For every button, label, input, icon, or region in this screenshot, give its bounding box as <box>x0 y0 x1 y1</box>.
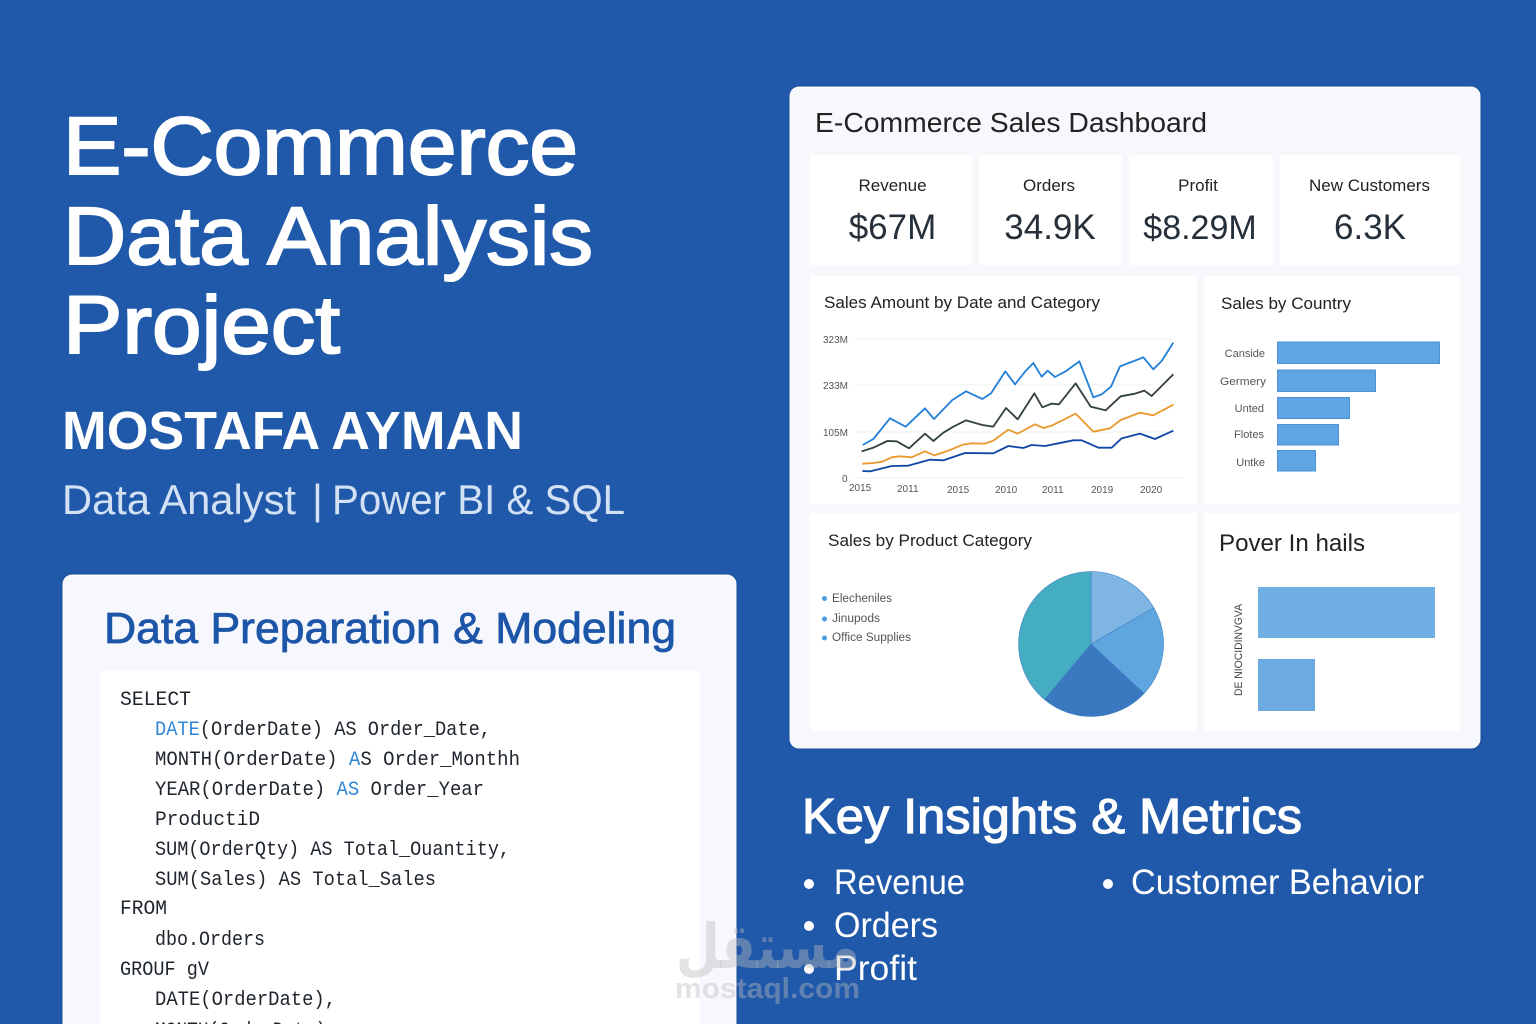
title: Project <box>63 280 340 371</box>
sql code block: dbo.Orders <box>155 929 265 952</box>
pie chart <box>1019 572 1164 716</box>
kpi: orders: Orders <box>1023 176 1075 195</box>
line chart: 233M <box>823 381 848 392</box>
dashboard title: E-Commerce Sales Dashboard <box>815 107 1207 138</box>
heading: key insights: Key Insights & Metrics <box>802 790 1302 844</box>
title: Data Analysis <box>63 191 593 282</box>
kpi: orders: 34.9K <box>1004 208 1096 247</box>
bar chart: countries <box>1220 342 1440 471</box>
kpi: profit <box>1129 155 1273 265</box>
sql code block: YEAR(OrderDate) AS Order_Year <box>155 779 484 802</box>
sql code block: SELECT <box>120 689 191 712</box>
author role <box>62 476 625 523</box>
panel: power in hails <box>1204 513 1460 731</box>
line chart: 0 <box>842 474 848 485</box>
title: E-Commerce <box>63 101 578 192</box>
insights list: Customer Behavior <box>1131 863 1424 902</box>
line chart: 2015 <box>947 485 970 496</box>
kpi: new customers <box>1280 155 1460 265</box>
line chart: 2015 <box>849 483 872 494</box>
author role: Data Analyst <box>62 476 296 523</box>
line chart: 323M <box>823 335 848 346</box>
sql code block: MONTH(OrderDate) AS Order_Monthh <box>155 749 520 772</box>
bar chart: countries: Canside <box>1225 348 1265 360</box>
kpi: revenue: Revenue <box>858 176 927 195</box>
bar chart: power <box>1233 587 1435 711</box>
sql code block: ProductiD <box>155 809 260 832</box>
watermark <box>675 910 860 1005</box>
panel: sales dashboard <box>789 86 1481 749</box>
panel: power in hails: Pover In hails <box>1219 530 1365 557</box>
panel: sales by country: Sales by Country <box>1221 295 1352 313</box>
sql code block: SUM(Sales) AS Total_Sales <box>155 869 436 892</box>
line chart: 2010 <box>995 485 1018 496</box>
bar chart: power: DE NIOCIDINVGVA <box>1233 603 1245 696</box>
insights list: Profit <box>834 949 917 988</box>
legend: Jinupods <box>832 613 880 625</box>
bar chart: countries: Untke <box>1236 457 1265 469</box>
kpi: new customers: New Customers <box>1309 176 1430 195</box>
sql code block: FROM <box>120 898 167 921</box>
kpi: profit: Profit <box>1178 176 1218 195</box>
legend: Office Supplies <box>832 632 911 644</box>
line chart: 2011 <box>897 484 919 495</box>
author role: | <box>312 476 323 523</box>
sql code block <box>100 671 700 1024</box>
kpi: orders <box>979 155 1122 265</box>
line chart: 105M <box>823 428 848 439</box>
bar chart: countries: Unted <box>1235 403 1264 415</box>
insights list <box>804 863 1424 988</box>
sql code block: SUM(OrderQty) AS Total_Ouantity, <box>155 839 510 862</box>
legend: Elecheniles <box>832 593 892 605</box>
legend <box>822 593 911 644</box>
insights list: Orders <box>834 906 938 945</box>
kpi: revenue: $67M <box>849 208 936 247</box>
panel: data preparation and modeling <box>62 574 737 1024</box>
sql code block: DATE(OrderDate), <box>155 989 336 1012</box>
line chart: 2020 <box>1140 485 1163 496</box>
line chart <box>823 335 1182 496</box>
panel heading: Data Preparation & Modeling <box>104 604 676 653</box>
kpi: new customers: 6.3K <box>1334 208 1406 247</box>
bar chart: countries: Germery <box>1220 376 1267 388</box>
panel: sales by product category <box>810 513 1197 731</box>
kpi: profit: $8.29M <box>1143 209 1257 247</box>
line chart: 2019 <box>1091 485 1114 496</box>
sql code block: GROUF gV <box>120 959 209 982</box>
panel: sales amount line chart: Sales Amount by Date and Category <box>824 294 1101 312</box>
watermark: مستقل <box>676 910 860 983</box>
title <box>63 101 593 371</box>
sql code block: DATE(OrderDate) AS Order_Date, <box>155 719 491 742</box>
bar chart: countries: Flotes <box>1234 429 1264 441</box>
insights list: Revenue <box>834 863 965 902</box>
line chart: 2011 <box>1042 485 1064 496</box>
author name: MOSTAFA AYMAN <box>62 401 523 461</box>
kpi: revenue <box>810 155 972 265</box>
panel: sales by country <box>1204 276 1460 504</box>
author role: Power BI & SQL <box>332 476 625 523</box>
panel: sales by product category: Sales by Product Category <box>828 532 1033 550</box>
panel: sales amount line chart <box>810 276 1197 504</box>
watermark: mostaql.com <box>675 973 860 1005</box>
